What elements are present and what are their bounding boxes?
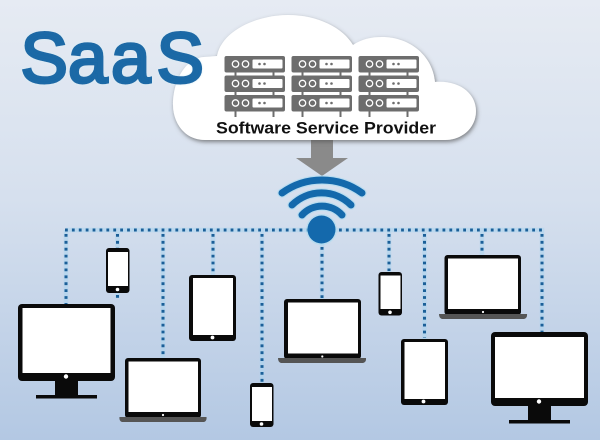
network dotted lines bbox=[65, 230, 542, 383]
cloud: software service provider bbox=[173, 15, 476, 140]
device: laptop 2 bbox=[278, 299, 366, 363]
device: desktop monitor left bbox=[18, 304, 115, 398]
device: tablet 2 bbox=[401, 339, 448, 405]
device: phone 3 bbox=[378, 272, 402, 316]
device: desktop monitor right bbox=[491, 332, 588, 424]
device: laptop 3 bbox=[439, 255, 527, 319]
device: laptop 1 bbox=[119, 358, 207, 422]
server racks bbox=[224, 56, 419, 117]
icon: wifi signal bbox=[282, 180, 362, 245]
device: phone 1 bbox=[106, 248, 130, 293]
title: SaaS bbox=[20, 20, 204, 98]
device: phone 2 bbox=[250, 383, 274, 427]
cloud label: Software Service Provider bbox=[216, 120, 437, 138]
arrow: cloud to wifi bbox=[296, 138, 348, 176]
device: tablet 1 bbox=[189, 275, 236, 341]
cloud shape bbox=[173, 15, 476, 140]
